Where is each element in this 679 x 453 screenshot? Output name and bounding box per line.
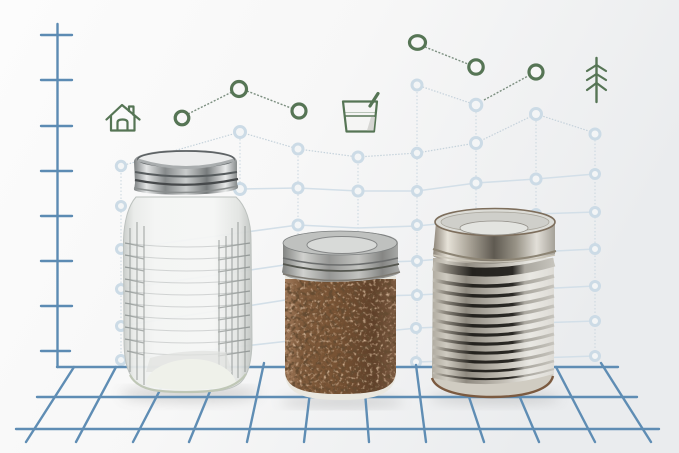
green chart markers — [175, 36, 543, 125]
jar body — [124, 197, 252, 392]
jar base rim — [130, 374, 246, 392]
ribbed glass side grid — [125, 222, 250, 385]
metal lid — [134, 150, 238, 195]
metal lid — [282, 231, 400, 282]
light grain texture — [285, 279, 396, 394]
icon: pine tree — [587, 58, 606, 102]
icon: house — [106, 105, 140, 130]
dark grain texture — [285, 279, 396, 394]
pale background line chart — [116, 80, 600, 366]
ribbed glass center lines — [125, 243, 251, 355]
vertical dotted drop lines — [121, 85, 595, 362]
ribbed tin can — [432, 208, 556, 397]
jar glass — [285, 276, 396, 400]
dotted upper series line — [121, 85, 595, 166]
glass jar with sugar — [124, 150, 252, 392]
soft floor shadows — [120, 386, 561, 408]
blue perspective floor grid — [16, 363, 659, 442]
solid horizontal series lines — [121, 174, 595, 362]
sugar pile — [146, 359, 236, 390]
can lid top — [435, 208, 555, 236]
can upper band — [433, 222, 555, 263]
can body — [432, 258, 554, 397]
brown grain contents — [285, 279, 396, 394]
glass jar with brown grain — [282, 231, 400, 400]
can ribs — [433, 262, 554, 379]
pale lower can band — [432, 374, 553, 397]
blue vertical axis with ticks — [41, 24, 72, 367]
residue texture above sugar — [146, 351, 232, 372]
green dotted connectors — [188, 47, 528, 114]
icon: cup with spoon — [343, 94, 378, 132]
brown base rim — [432, 376, 553, 397]
pale chart markers — [116, 80, 600, 366]
